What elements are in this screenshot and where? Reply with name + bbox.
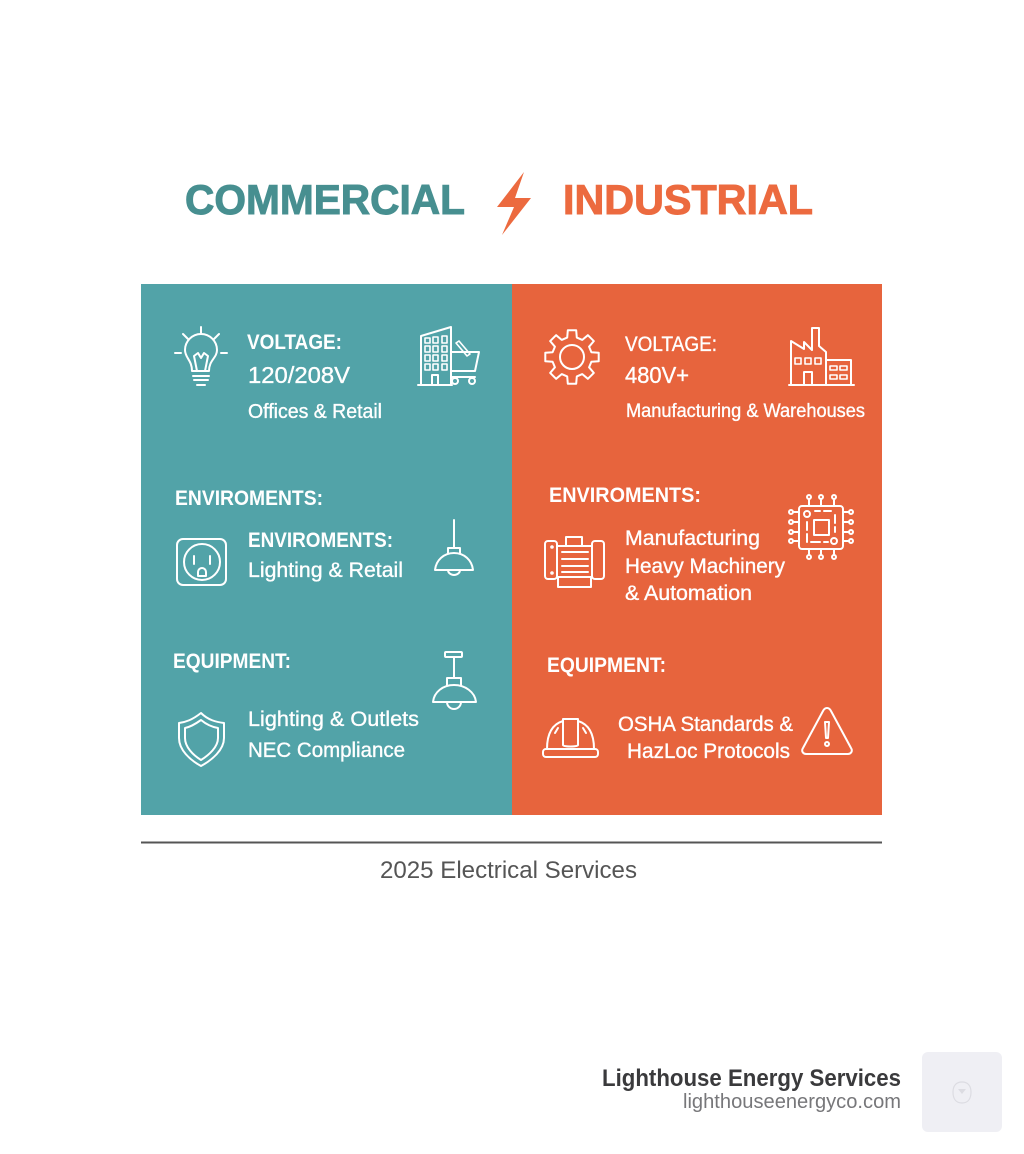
text: manufacturing and warehouses: Manufacturing & Warehouses: [626, 401, 865, 422]
text: 120/208V: 120/208V: [248, 362, 351, 388]
text: equipment heading: EQUIPMENT:: [547, 654, 666, 677]
icon: heavy machine: [545, 537, 604, 587]
text: osha standards: OSHA Standards &: [618, 713, 793, 736]
icon: factory: [789, 328, 854, 385]
text: equipment heading: EQUIPMENT:: [173, 650, 291, 673]
text: hazloc protocols: HazLoc Protocols: [627, 740, 790, 763]
icon: hard hat: [543, 719, 598, 757]
icon: light bulb: [175, 327, 227, 385]
footer caption: 2025 Electrical Services: [380, 857, 637, 884]
text: offices and retail: Offices & Retail: [248, 401, 382, 423]
text: nec compliance: NEC Compliance: [248, 739, 405, 762]
icon: warning triangle: [802, 708, 852, 754]
brand block: [602, 1052, 1002, 1132]
footer rule: [141, 842, 882, 844]
title: [185, 172, 813, 235]
heading: commercial: COMMERCIAL: [185, 176, 465, 223]
text: environments heading: ENVIROMENTS:: [549, 484, 701, 507]
text: automation: & Automation: [625, 582, 752, 605]
brand url: lighthouseenergyco.com: [683, 1091, 901, 1113]
brand name: Lighthouse Energy Services: [602, 1065, 901, 1092]
text: voltage: VOLTAGE:: [625, 333, 717, 356]
text: 480V+: 480V+: [625, 362, 689, 388]
icon: wall outlet: [177, 539, 226, 585]
icon: pendant lamp: [435, 520, 473, 575]
text: lighting and retail: Lighting & Retail: [248, 559, 403, 582]
icon: gear: [545, 330, 599, 384]
icon: lightning bolt: [497, 172, 531, 235]
panel: industrial: [512, 284, 882, 815]
icon: circuit chip: [789, 495, 853, 559]
heading: industrial: INDUSTRIAL: [563, 176, 813, 223]
text: environments subheading: ENVIROMENTS:: [248, 529, 393, 552]
icon: shield: [179, 713, 224, 766]
logo placeholder: [922, 1052, 1002, 1132]
text: heavy machinery: Heavy Machinery: [625, 555, 785, 578]
text: environments heading: ENVIROMENTS:: [175, 487, 323, 510]
text: manufacturing: Manufacturing: [625, 527, 760, 550]
icon: building and cart: [418, 327, 479, 385]
icon: ceiling lamp: [433, 652, 476, 709]
panel: commercial: [141, 284, 512, 815]
text: voltage: VOLTAGE:: [247, 331, 342, 354]
text: lighting and outlets: Lighting & Outlets: [248, 708, 419, 731]
